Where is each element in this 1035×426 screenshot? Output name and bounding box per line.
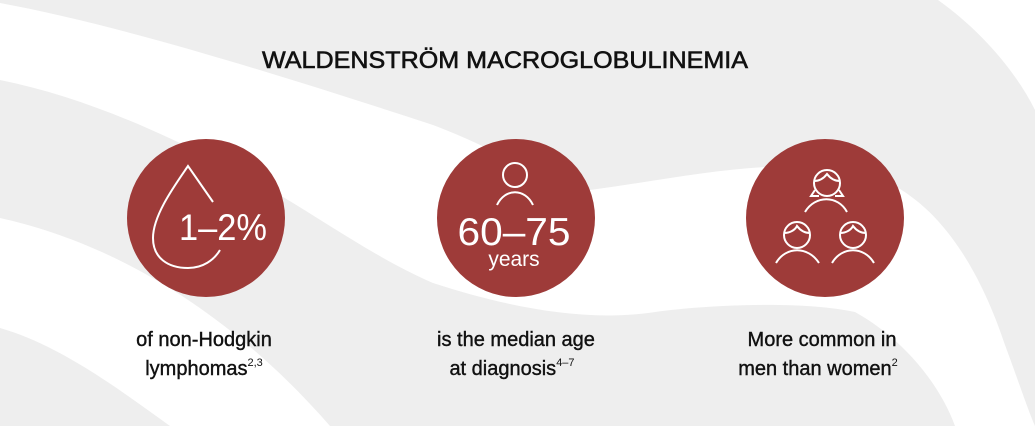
caption 2: at diagnosis [449, 357, 575, 380]
caption 3: More common in [748, 329, 896, 351]
caption 2: 4–7 [556, 357, 575, 369]
panel: sex ratio [738, 139, 904, 380]
icon: drop [153, 166, 220, 268]
stat 1-2%: 1–2% [179, 207, 267, 248]
icon: person [497, 163, 533, 205]
caption 1: 2,3 [247, 357, 263, 369]
caption 3: men than women [738, 357, 898, 380]
circle 1 [127, 139, 285, 297]
caption 3: 2 [892, 357, 898, 369]
caption 1: lymphomas [145, 357, 263, 380]
circle 2 [437, 139, 595, 297]
stat 60-75: 60–75 [458, 211, 570, 254]
title: WALDENSTRÖM MACROGLOBULINEMIA [262, 47, 748, 74]
stat unit years: years [488, 248, 540, 271]
icon: people group [776, 170, 874, 263]
panel: lymphoma stat [127, 139, 285, 380]
caption 2: is the median age [437, 329, 595, 351]
circle 3 [746, 139, 904, 297]
caption 1: of non-Hodgkin [136, 329, 272, 351]
panel: median age [437, 139, 595, 380]
